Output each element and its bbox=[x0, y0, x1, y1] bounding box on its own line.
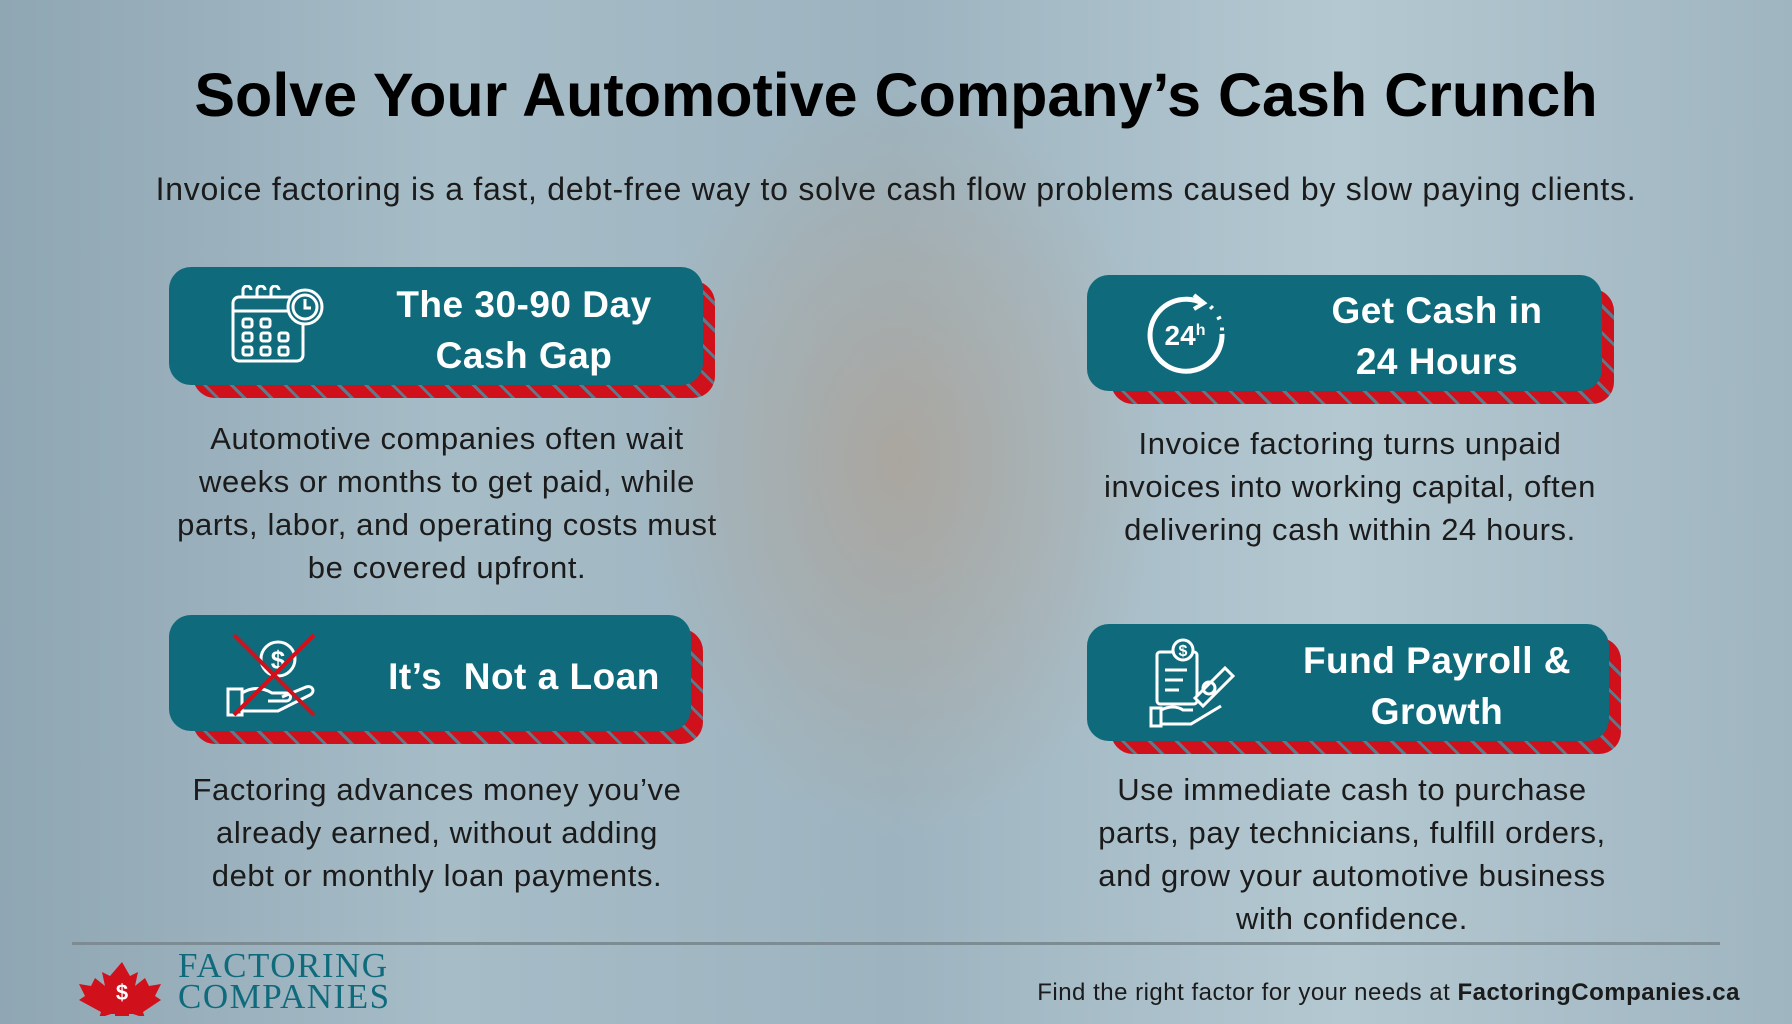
icon: maple leaf bbox=[79, 962, 161, 1016]
body: not a loan: debt or monthly loan payments. bbox=[212, 858, 662, 893]
card title: Get Cash in bbox=[1331, 290, 1543, 331]
card title: It’s Not a Loan bbox=[388, 656, 660, 697]
body: cash gap: weeks or months to get paid, while bbox=[199, 464, 695, 499]
body: payroll: with confidence. bbox=[1236, 901, 1468, 936]
card: cash gap bbox=[169, 267, 715, 398]
icon: crossed-out loan bbox=[226, 634, 316, 716]
icon: money hand: $ bbox=[1179, 643, 1188, 660]
icon: 24h: h bbox=[1196, 322, 1205, 339]
body: payroll: and grow your automotive business bbox=[1098, 858, 1606, 893]
subtitle: Invoice factoring is a fast, debt-free way to solve cash flow problems caused by slow paying clients. bbox=[156, 171, 1636, 207]
body: cash gap: parts, labor, and operating costs must bbox=[177, 507, 717, 542]
card title bbox=[1303, 640, 1571, 732]
icon: calendar clock bbox=[232, 285, 324, 362]
body: not a loan bbox=[192, 772, 682, 893]
logo text: COMPANIES bbox=[178, 977, 391, 1016]
card title bbox=[1331, 290, 1543, 382]
icon: crossed-out loan: $ bbox=[271, 645, 286, 675]
body: 24 hours: delivering cash within 24 hours. bbox=[1124, 512, 1576, 547]
card: 24 hours bbox=[1087, 275, 1614, 404]
icon: 24h bbox=[1148, 294, 1224, 374]
icon: maple leaf: $ bbox=[116, 980, 128, 1005]
card title: The 30-90 Day bbox=[396, 284, 652, 325]
body: cash gap bbox=[177, 421, 717, 585]
body: cash gap: be covered upfront. bbox=[308, 550, 586, 585]
logo text: FACTORING bbox=[178, 946, 389, 985]
title: Solve Your Automotive Company’s Cash Crunch bbox=[194, 61, 1598, 129]
card title: Growth bbox=[1371, 691, 1503, 732]
icon: money hand bbox=[1150, 638, 1235, 728]
icon: 24h: 24 bbox=[1165, 320, 1196, 351]
body: payroll: Use immediate cash to purchase bbox=[1117, 772, 1587, 807]
body: 24 hours bbox=[1104, 426, 1596, 547]
card title: Cash Gap bbox=[436, 335, 612, 376]
body: 24 hours: invoices into working capital, often bbox=[1104, 469, 1596, 504]
body: 24 hours: Invoice factoring turns unpaid bbox=[1139, 426, 1561, 461]
card title: 24 Hours bbox=[1356, 341, 1518, 382]
body: not a loan: already earned, without adding bbox=[216, 815, 658, 850]
card: payroll bbox=[1087, 624, 1621, 754]
body: payroll: parts, pay technicians, fulfill orders, bbox=[1098, 815, 1606, 850]
logo bbox=[79, 946, 391, 1016]
card title: Fund Payroll & bbox=[1303, 640, 1571, 681]
body: not a loan: Factoring advances money you’ve bbox=[192, 772, 682, 807]
card: not a loan bbox=[169, 615, 703, 744]
footer: Find the right factor for your needs at FactoringCompanies.ca bbox=[1037, 979, 1740, 1006]
body: cash gap: Automotive companies often wait bbox=[210, 421, 684, 456]
body: payroll bbox=[1098, 772, 1606, 936]
card title bbox=[396, 284, 652, 376]
logo text bbox=[178, 946, 391, 1016]
